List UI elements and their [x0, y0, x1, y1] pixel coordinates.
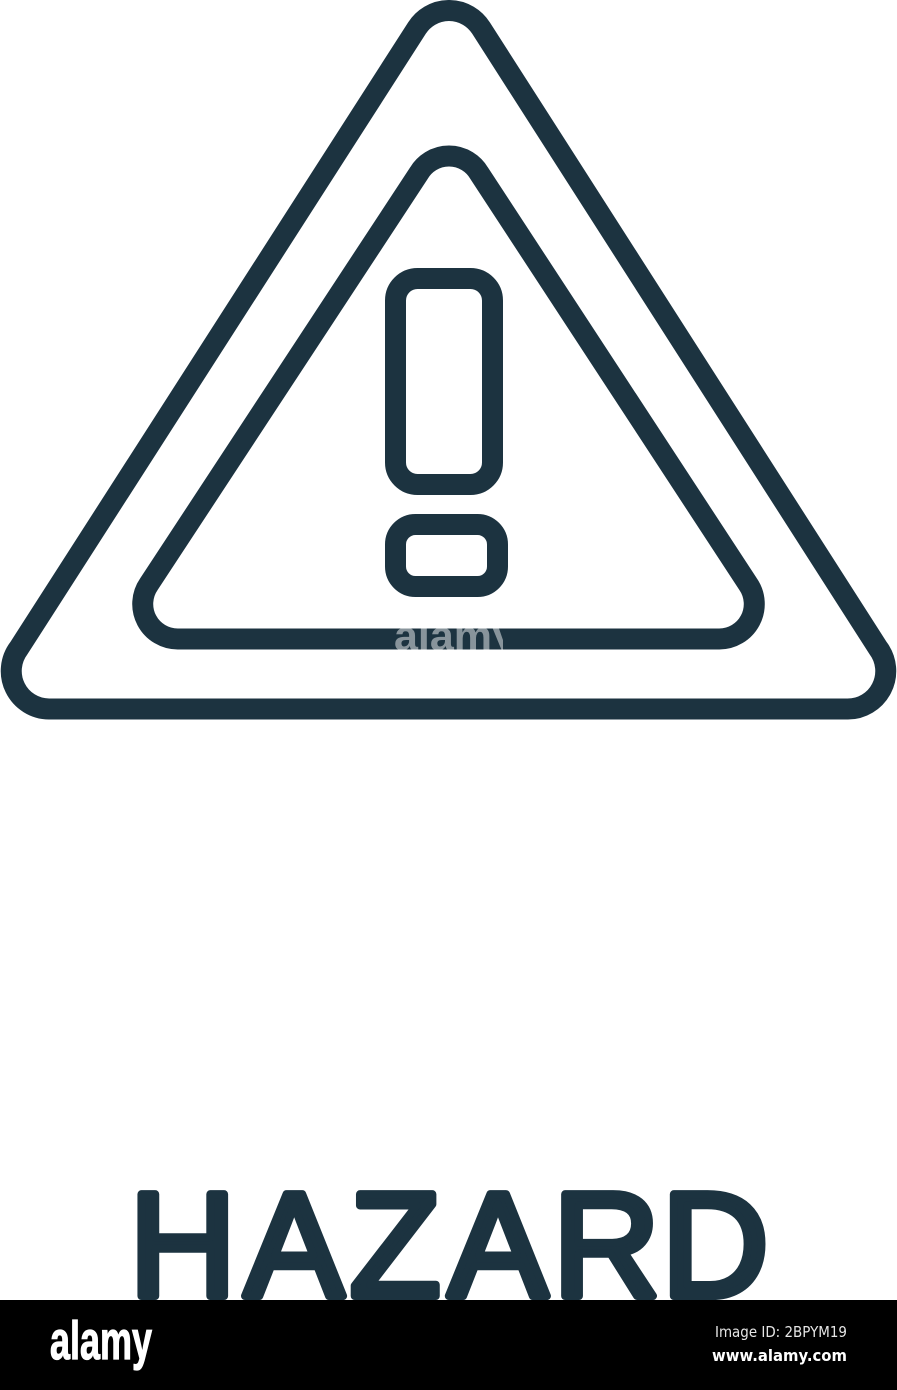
outer triangle	[11, 10, 886, 709]
heading: HAZARD: HAZARD	[129, 1163, 769, 1328]
icon: hazard warning triangle	[11, 10, 886, 709]
inner triangle	[143, 156, 754, 639]
exclamation mark bar	[396, 278, 492, 484]
watermark: alamy over inner triangle base: alamy	[394, 612, 517, 659]
footer logo: alamy: alamy	[50, 1311, 152, 1371]
exclamation mark dot	[396, 524, 498, 586]
website url: www.alamy.com	[712, 1346, 847, 1365]
footer bar	[0, 1300, 897, 1390]
image id: Image ID: 2BPYM19	[715, 1323, 847, 1341]
